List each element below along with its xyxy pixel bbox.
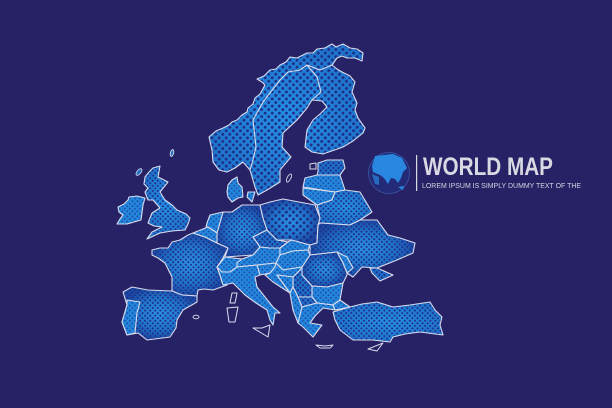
title: WORLD MAP	[423, 153, 553, 181]
Bulgaria	[312, 283, 343, 305]
Turkey	[333, 300, 443, 342]
Ireland	[117, 196, 145, 224]
Mallorca	[193, 315, 199, 319]
Cyprus	[368, 343, 383, 351]
Germany	[217, 205, 267, 257]
France	[152, 233, 228, 296]
Czech Republic and Slovakia	[253, 230, 310, 255]
Belarus	[317, 190, 372, 225]
Poland	[260, 199, 320, 245]
subtitle: LOREM IPSUM IS SIMPLY DUMMY TEXT OF THE	[422, 181, 581, 190]
Scandinavia and Finland	[209, 44, 365, 195]
United Kingdom	[144, 166, 190, 239]
divider	[416, 155, 417, 191]
globe icon	[368, 152, 410, 194]
Netherlands and Belgium	[193, 212, 223, 243]
Denmark	[227, 177, 255, 202]
Bosnia	[277, 275, 293, 293]
Scottish islands	[135, 168, 143, 176]
Serbia	[293, 267, 312, 297]
Sicily	[253, 325, 270, 337]
Hungary	[276, 250, 310, 270]
Corsica	[230, 293, 237, 303]
Italy	[217, 265, 280, 325]
map of Europe	[117, 44, 443, 351]
Moldova	[337, 252, 353, 273]
Baltic states	[303, 160, 345, 205]
Crete	[316, 345, 333, 348]
Albania and Macedonia	[290, 287, 317, 323]
Sardinia	[227, 307, 238, 322]
Gotland	[285, 173, 293, 183]
Romania	[302, 252, 347, 287]
Switzerland and Austria	[217, 247, 280, 272]
Iceland fragment	[170, 149, 174, 157]
Slovenia and Croatia	[257, 263, 302, 293]
Ukraine	[310, 220, 415, 281]
Greece	[298, 303, 335, 337]
Spain and Portugal	[122, 287, 197, 340]
